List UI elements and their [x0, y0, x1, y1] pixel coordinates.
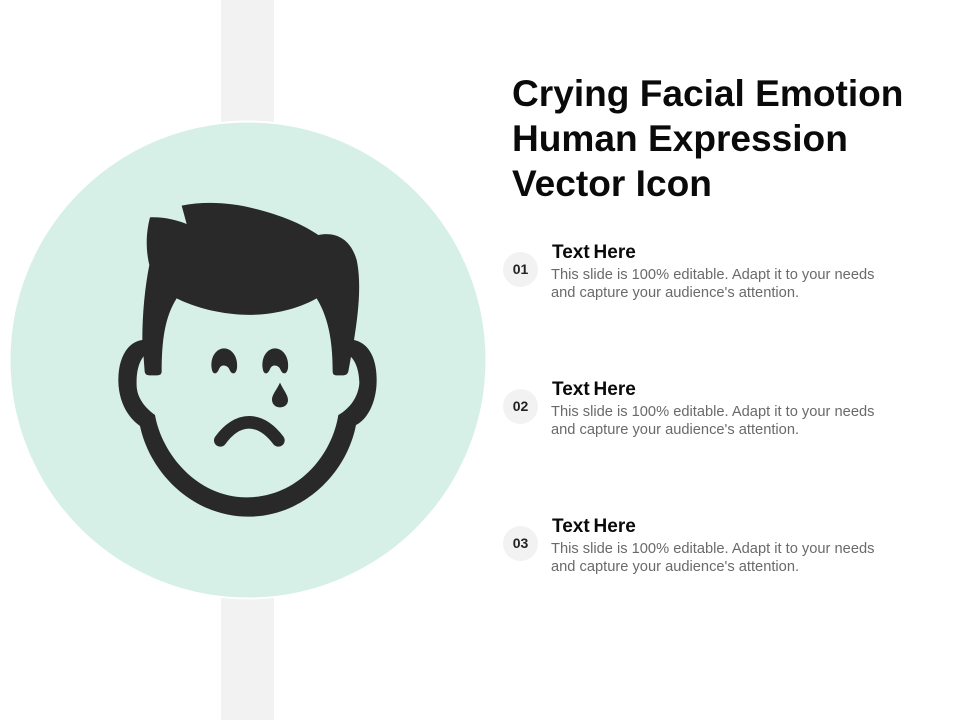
head outline: [118, 340, 377, 517]
title: Crying Facial Emotion: [512, 72, 903, 114]
number badge 01: 01: [513, 261, 528, 277]
heading 02: Text Here: [552, 379, 636, 400]
body 03: and capture your audience's attention.: [551, 559, 799, 575]
list item 02: [503, 379, 874, 438]
body 03: [551, 541, 874, 575]
heading 01: Text Here: [552, 242, 636, 263]
list item 01: [503, 242, 874, 301]
illustration: crying face in circle: [10, 120, 486, 600]
tear drop: [272, 383, 288, 407]
body 02: [551, 404, 874, 438]
body 02: and capture your audience's attention.: [551, 422, 799, 438]
body 02: This slide is 100% editable. Adapt it to your needs: [551, 404, 874, 420]
title: [512, 72, 903, 204]
icon: crying face: [118, 203, 377, 517]
list item 03: [503, 516, 874, 575]
title: Vector Icon: [512, 162, 712, 204]
body 01: [551, 267, 874, 301]
number badge 03: 03: [513, 535, 528, 551]
heading 03: Text Here: [552, 516, 636, 537]
hair: [142, 203, 359, 375]
right eye: [262, 348, 288, 373]
mint circle: [10, 122, 486, 598]
left eye: [211, 348, 237, 373]
body 01: and capture your audience's attention.: [551, 285, 799, 301]
title: Human Expression: [512, 117, 848, 159]
body 03: This slide is 100% editable. Adapt it to your needs: [551, 541, 874, 557]
number badge 02: [503, 389, 538, 424]
number badge 01: [503, 252, 538, 287]
body 01: This slide is 100% editable. Adapt it to your needs: [551, 267, 874, 283]
sad mouth: [220, 422, 278, 440]
face interior: [137, 290, 359, 497]
number badge 03: [503, 526, 538, 561]
vertical bar behind circle: [221, 0, 274, 720]
number badge 02: 02: [513, 398, 528, 414]
